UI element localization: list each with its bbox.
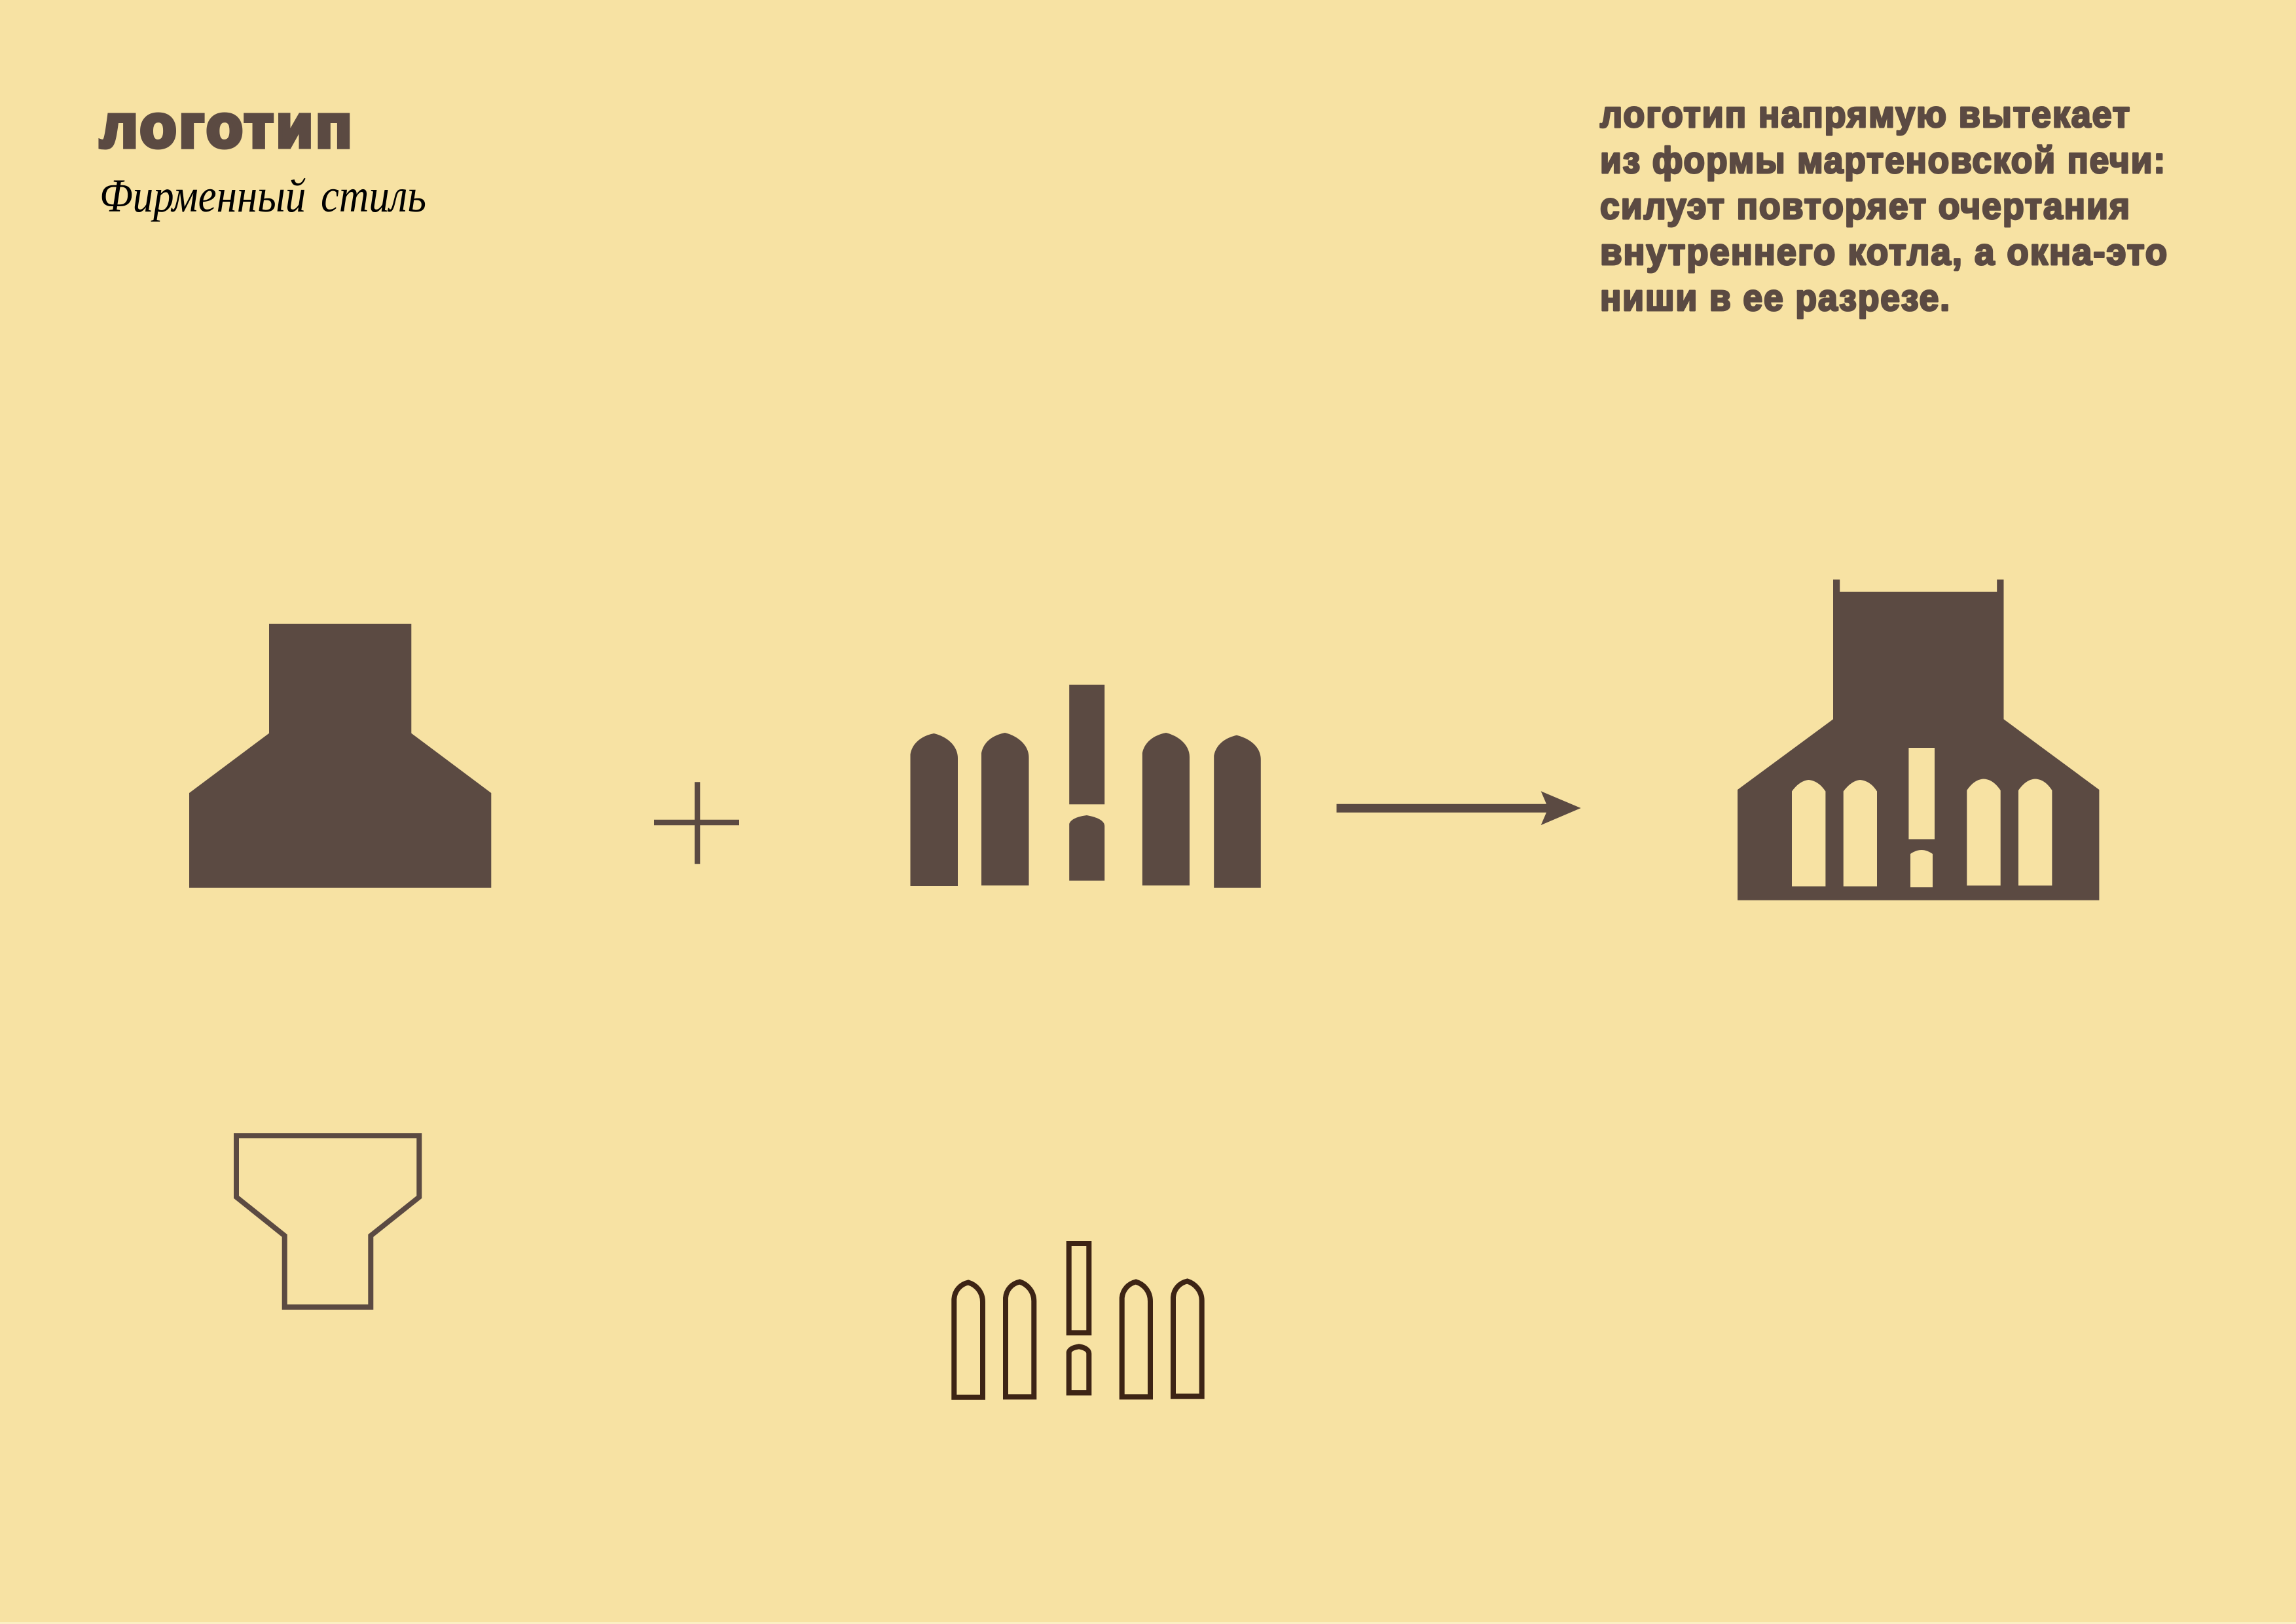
subtitle: Фирменный стиль: [100, 170, 426, 222]
description text block: из формы мартеновской печи:: [1600, 139, 2166, 181]
description text block: ниши в ее разрезе.: [1600, 277, 1951, 319]
icon: solid window niches: [910, 685, 1261, 888]
arrow: [1337, 791, 1581, 825]
icon: solid furnace silhouette: [189, 624, 491, 888]
description text block: [1600, 94, 2168, 319]
icon: plus sign: [654, 782, 739, 864]
icon: final logo: [1738, 580, 2099, 900]
icon: outline window niches: [954, 1244, 1202, 1397]
description text block: внутреннего котла, а окна-это: [1600, 231, 2168, 273]
title: логотип: [100, 94, 355, 160]
description text block: логотип напрямую вытекает: [1600, 94, 2131, 136]
icon: outline furnace inverted: [236, 1135, 419, 1307]
description text block: силуэт повторяет очертания: [1600, 185, 2131, 227]
